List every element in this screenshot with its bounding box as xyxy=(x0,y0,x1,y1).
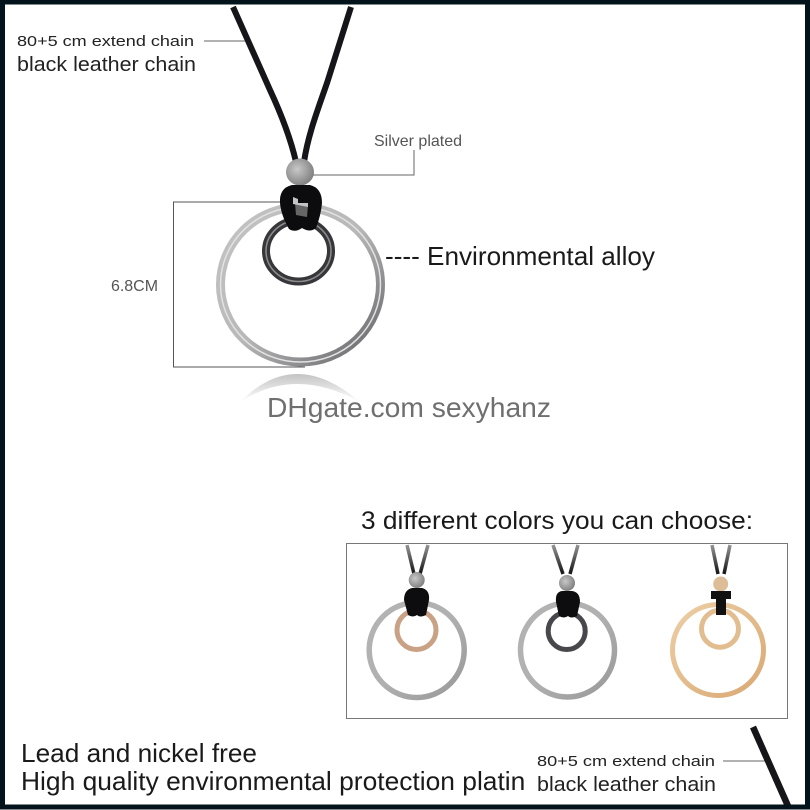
icon: black knot xyxy=(280,185,322,231)
callout: silver plated: Silver plated xyxy=(374,133,462,150)
watermark: DHgate.com sexyhanz xyxy=(267,392,551,423)
dimension bracket: 6.8CM: 6.8CM xyxy=(111,278,158,295)
panel: colour variants xyxy=(346,544,788,718)
text block: features xyxy=(21,738,540,796)
icon: small dark ring xyxy=(266,220,331,282)
dimension bracket: 6.8CM xyxy=(111,202,305,367)
icon: silver and rose variant xyxy=(369,545,464,698)
callout: chain length bottom: 80+5 cm extend chain xyxy=(537,753,715,770)
icon: large silver ring xyxy=(220,207,380,362)
icon: silver and black variant xyxy=(520,545,614,697)
text block: features: Lead and nickel free xyxy=(21,738,257,768)
callout: chain length top xyxy=(17,33,245,76)
icon: leather cords xyxy=(233,7,351,162)
callout: chain length bottom: black leather chain xyxy=(537,774,716,796)
callout: silver plated xyxy=(313,133,462,175)
callout: chain length bottom xyxy=(537,753,765,796)
icon: gold variant xyxy=(672,545,764,696)
reflection under necklace xyxy=(240,374,360,402)
callout: environmental alloy: ---- Environmental alloy xyxy=(385,241,655,271)
heading: colour choices: 3 different colors you can choose: xyxy=(361,507,753,535)
main necklace xyxy=(220,7,380,362)
icon: bottom leather cord xyxy=(753,727,788,806)
callout: chain length top: black leather chain xyxy=(17,54,196,76)
callout: chain length top: 80+5 cm extend chain xyxy=(17,33,194,50)
text block: features: High quality environmental protection plating xyxy=(21,766,540,796)
icon: silver bead xyxy=(286,158,314,186)
